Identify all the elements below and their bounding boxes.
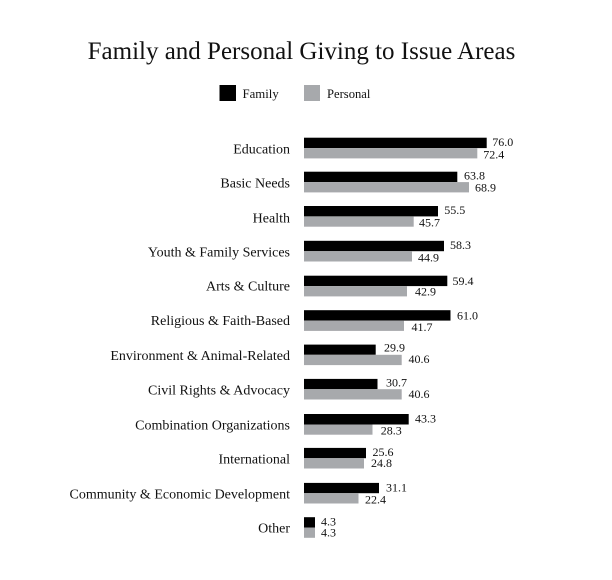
row: Community & Economic Development: 31.1 xyxy=(386,481,407,495)
row: Combination Organizations xyxy=(135,412,436,437)
row: Education: Education xyxy=(233,142,290,157)
row: International: International xyxy=(218,452,290,467)
row: Civil Rights & Advocacy: 40.6 xyxy=(408,387,430,401)
row: Environment & Animal-Related: 29.9 xyxy=(384,341,405,355)
row: Combination Organizations: Combination Organizations xyxy=(135,418,290,433)
row: Education: 76.0 xyxy=(492,135,513,149)
row: Basic Needs xyxy=(220,168,496,194)
row: Community & Economic Development: Community & Economic Development xyxy=(70,487,290,502)
row: Combination Organizations: 28.3 xyxy=(381,423,402,437)
row: Youth & Family Services: 58.3 xyxy=(450,238,471,252)
row: Arts & Culture: Arts & Culture xyxy=(206,280,290,295)
row: Other xyxy=(258,514,336,540)
legend: Personal: Personal xyxy=(327,87,371,101)
row: Education: 72.4 xyxy=(483,148,504,162)
row: Civil Rights & Advocacy: Civil Rights & Advocacy xyxy=(148,383,290,398)
row: Health: 45.7 xyxy=(419,215,440,229)
row: Arts & Culture xyxy=(206,274,474,298)
row: Religious & Faith-Based xyxy=(151,308,478,334)
row: Other: Other xyxy=(258,522,290,537)
row: Arts & Culture: 42.9 xyxy=(415,284,436,298)
row: Civil Rights & Advocacy: 30.7 xyxy=(386,376,407,390)
row: Health xyxy=(253,203,465,229)
title: Family and Personal Giving to Issue Areas xyxy=(88,38,515,65)
row: International xyxy=(218,445,394,470)
row: Environment & Animal-Related: Environment & Animal-Related xyxy=(110,349,290,364)
row: Education xyxy=(233,135,513,162)
row: Basic Needs: Basic Needs xyxy=(220,177,290,192)
row: Community & Economic Development: 22.4 xyxy=(365,492,386,506)
row: Environment & Animal-Related: 40.6 xyxy=(408,352,430,366)
row: Health: 55.5 xyxy=(444,203,465,217)
row: Religious & Faith-Based: 41.7 xyxy=(412,320,432,334)
row: Youth & Family Services: Youth & Family Services xyxy=(148,246,290,260)
legend: Family xyxy=(220,85,279,101)
row: Basic Needs: 63.8 xyxy=(464,168,485,182)
row: Civil Rights & Advocacy xyxy=(148,376,430,401)
bar chart xyxy=(70,135,513,540)
row: Other: 4.3 xyxy=(321,514,336,528)
row: International: 25.6 xyxy=(372,445,394,459)
row: Environment & Animal-Related xyxy=(110,341,430,366)
legend: Personal xyxy=(304,85,371,101)
row: Community & Economic Development xyxy=(70,481,407,506)
row: Combination Organizations: 43.3 xyxy=(415,412,436,426)
row: International: 24.8 xyxy=(371,456,392,470)
row: Arts & Culture: 59.4 xyxy=(452,274,474,288)
row: Religious & Faith-Based: 61.0 xyxy=(457,308,478,322)
legend: Family: Family xyxy=(242,87,279,101)
legend xyxy=(220,85,371,101)
row: Basic Needs: 68.9 xyxy=(475,180,496,194)
row: Other: 4.3 xyxy=(321,526,336,540)
row: Health: Health xyxy=(253,211,290,226)
row: Youth & Family Services: 44.9 xyxy=(418,250,439,264)
row: Youth & Family Services xyxy=(148,238,471,264)
row: Religious & Faith-Based: Religious & Faith-Based xyxy=(151,314,290,329)
